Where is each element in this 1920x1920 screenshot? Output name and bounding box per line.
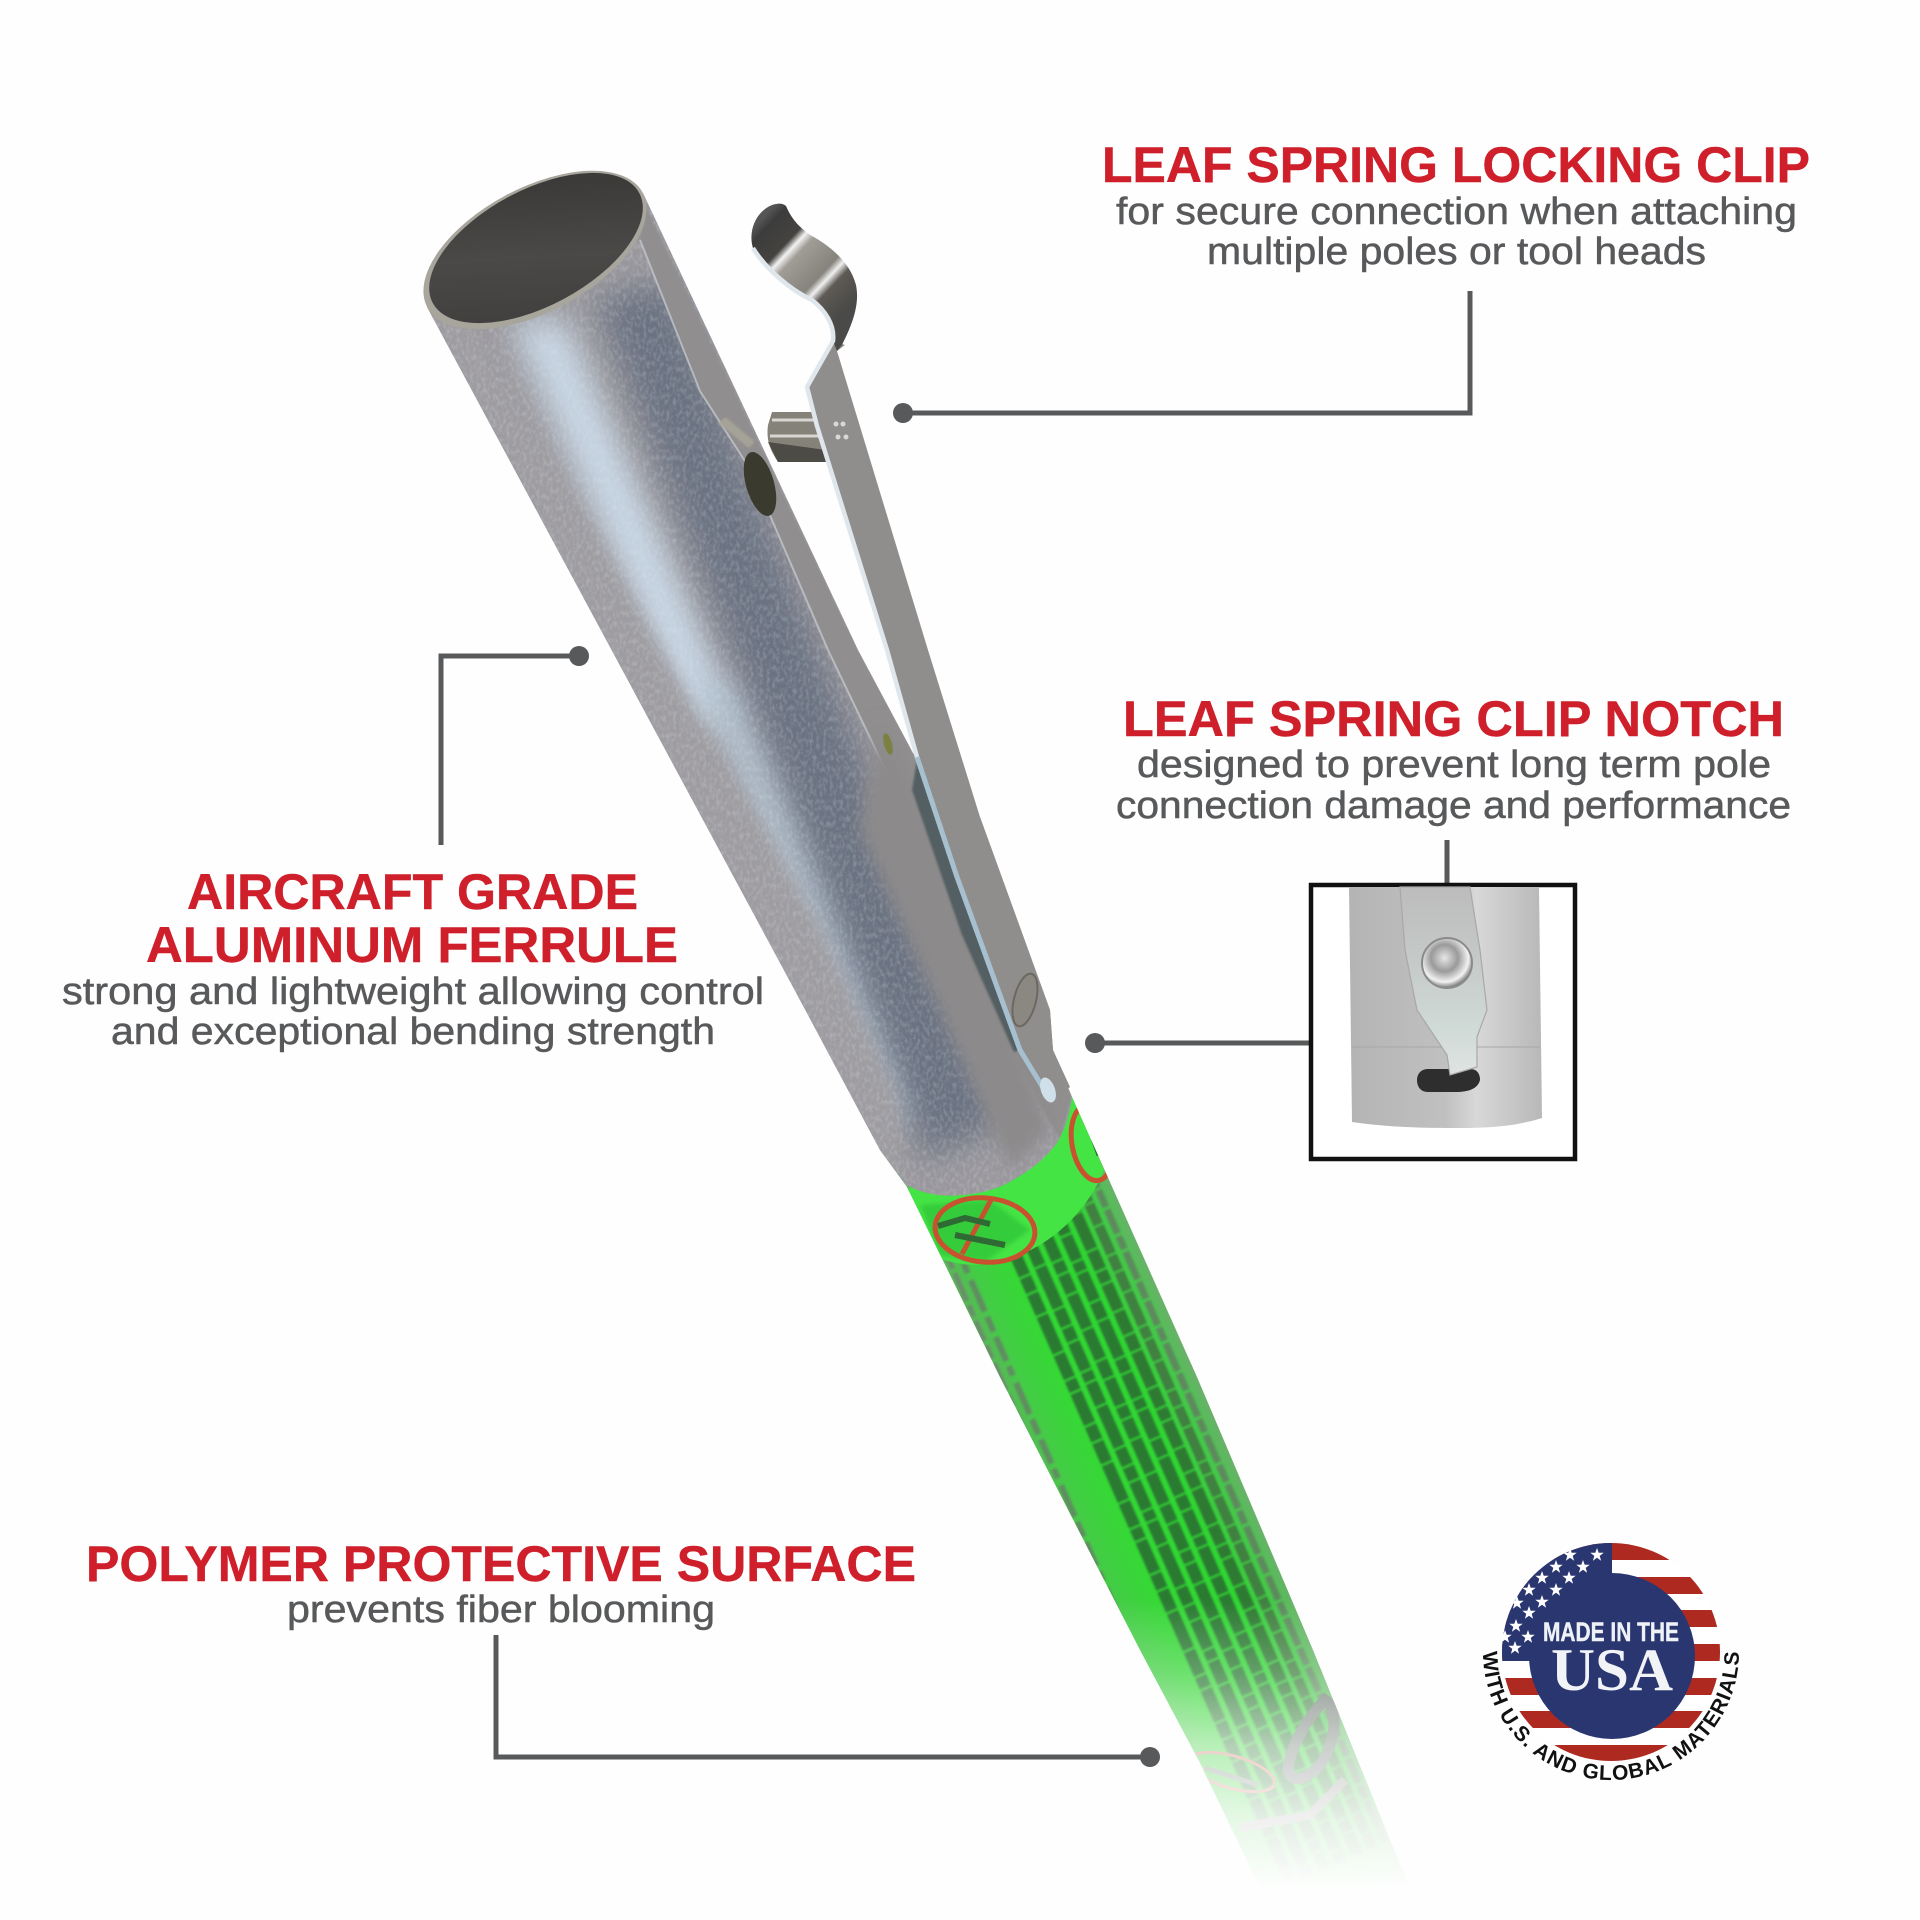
leader line bbox=[496, 1635, 1160, 1767]
description line 2: multiple poles or tool heads bbox=[1207, 231, 1706, 273]
strip right of crease bbox=[640, 205, 1072, 1140]
clip lit edge bbox=[753, 248, 1048, 1096]
heading: LEAF SPRING LOCKING CLIP bbox=[1102, 137, 1810, 193]
crease line bbox=[639, 240, 880, 760]
mauve left edge bbox=[420, 300, 900, 1190]
badge text: USA: USA bbox=[1551, 1637, 1673, 1703]
navy center circle bbox=[1529, 1573, 1695, 1739]
clip speck bbox=[881, 732, 895, 756]
inset notch slot bbox=[1417, 1069, 1480, 1092]
leader line to inset bbox=[1444, 840, 1450, 883]
description: prevents fiber blooming bbox=[287, 1589, 715, 1631]
highlight band lower bbox=[706, 680, 916, 1124]
description line 2: and exceptional bending strength bbox=[111, 1011, 715, 1053]
dark band bbox=[595, 280, 1010, 1160]
inset leaf spring bbox=[1400, 887, 1487, 1075]
callout: polymer protective surface bbox=[86, 1536, 1160, 1767]
aluminum ferrule bbox=[423, 170, 1072, 1196]
stars bbox=[1498, 1548, 1604, 1654]
description line 1: designed to prevent long term pole bbox=[1137, 744, 1771, 786]
callout: leaf spring locking clip bbox=[893, 137, 1810, 423]
clip rivet bbox=[1008, 971, 1042, 1029]
printed warning text rows bbox=[946, 1182, 1372, 1838]
leader line bbox=[893, 291, 1470, 423]
inset faint band bbox=[1352, 1046, 1540, 1048]
callout: aircraft grade aluminum ferrule bbox=[62, 646, 764, 1053]
heading line 2: ALUMINUM FERRULE bbox=[146, 917, 678, 973]
badge text: made in the: MADE IN THE bbox=[1543, 1617, 1679, 1647]
leader line from inset to dot bbox=[1085, 1033, 1311, 1053]
heading: LEAF SPRING CLIP NOTCH bbox=[1123, 691, 1784, 747]
clip tip bbox=[1037, 1075, 1059, 1105]
lower logo marks bbox=[1185, 1700, 1345, 1828]
highlight band upper bbox=[510, 320, 740, 730]
clip lower lit edge bbox=[917, 757, 1048, 1096]
heading: POLYMER PROTECTIVE SURFACE bbox=[86, 1536, 916, 1592]
texture bbox=[434, 200, 1070, 1196]
heading line 1: AIRCRAFT GRADE bbox=[187, 864, 638, 920]
inset rivet bbox=[1422, 938, 1472, 988]
green fiberglass pole bbox=[880, 1097, 1398, 1867]
leader line bbox=[441, 646, 589, 845]
clip body bbox=[807, 341, 1070, 1102]
flag circle bbox=[1500, 1540, 1725, 1765]
badge: made in the USA bbox=[1482, 1543, 1739, 1780]
clip studs bbox=[834, 422, 848, 440]
hole surround bbox=[722, 420, 752, 445]
ferrule opening bbox=[398, 138, 672, 362]
no-symbol mark on collar bbox=[920, 1102, 1118, 1266]
green collar band bbox=[906, 1095, 1104, 1265]
inset tube bbox=[1349, 887, 1542, 1128]
cross pin bbox=[767, 412, 826, 462]
inset photo: clip notch detail bbox=[1311, 885, 1575, 1159]
description line 2: connection damage and performance bbox=[1116, 785, 1791, 827]
description line 1: for secure connection when attaching bbox=[1116, 191, 1797, 233]
badge curved text: WITH U.S. AND GLOBAL MATERIALS bbox=[1482, 1650, 1739, 1780]
clip shadow bbox=[912, 760, 1020, 1052]
callout: leaf spring clip notch bbox=[1085, 691, 1791, 1053]
clip head bbox=[751, 204, 857, 351]
lower mauve band bbox=[860, 720, 1050, 1170]
description line 1: strong and lightweight allowing control bbox=[62, 971, 764, 1013]
leaf spring clip bbox=[751, 204, 1070, 1105]
side hole bbox=[737, 448, 783, 520]
